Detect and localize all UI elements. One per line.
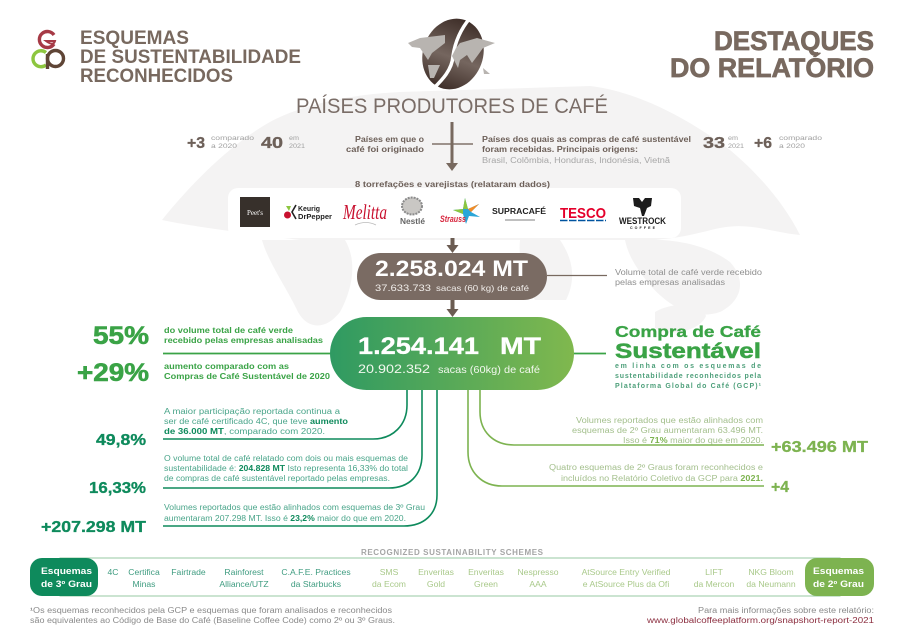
text: sustainable purchase origins: Brasil, Colômbia, Honduras, Indonésia, Vietnã xyxy=(482,156,671,165)
text: 4C share: ser de café certificado 4C, que teve aumento xyxy=(164,417,348,426)
text: more information link xyxy=(646,606,875,625)
list: third-grade schemes: C.A.F.E. Practices xyxy=(281,567,351,577)
text: sustainable purchase origins: Países dos quais as compras de café sustentável xyxy=(482,135,691,144)
text: four new schemes xyxy=(549,463,764,483)
list: third-grade schemes: Certifica xyxy=(128,567,160,577)
connector: right green line xyxy=(572,352,606,354)
text: second-grade volumes: esquemas de 2º Grau aumentaram 63.496 MT. xyxy=(572,426,763,435)
arrow: cross splitter xyxy=(432,122,473,171)
text: 4C share xyxy=(164,407,348,436)
badge: second-grade schemes xyxy=(805,558,874,596)
stats: sustainable countries: 33 xyxy=(703,135,725,152)
list: second-grade schemes: NKG Bloom xyxy=(748,567,794,577)
heading: destaques do relatório xyxy=(670,26,874,83)
list: second-grade schemes: da Ecom xyxy=(372,579,406,589)
text: +29% description xyxy=(164,362,331,381)
logo: Westrock Coffee: WESTROCK xyxy=(619,216,666,227)
text: 55% description: recebido pelas empresas analisadas xyxy=(164,336,324,345)
list: third-grade schemes: da Starbucks xyxy=(291,579,341,589)
stats: sustainable countries xyxy=(703,135,822,152)
connector: left green line xyxy=(163,352,332,354)
text: countries of origin: café foi originado xyxy=(346,145,424,154)
logo: Westrock Coffee xyxy=(619,198,666,230)
text: 55% description xyxy=(164,326,324,345)
stats: sustainable countries: a 2020 xyxy=(779,143,805,150)
stat: 55%: 55% xyxy=(93,322,149,350)
text: sustainable purchase origins: foram recebidas. Principais origens: xyxy=(482,145,638,154)
heading: esquemas de sustentabilidade: RECONHECIDOS xyxy=(80,65,233,87)
text: sustainable purchase origins xyxy=(482,135,691,165)
footnote: são equivalentes ao Código de Base do Café (Baseline Coffee Code) como 2º ou 3º Graus. xyxy=(30,616,395,625)
background world map xyxy=(162,86,800,332)
text: total volume description xyxy=(615,268,763,287)
text: total volume description: pelas empresas analisadas xyxy=(615,278,725,287)
stats: sustainable countries: 2021 xyxy=(728,143,744,150)
connectors: green pill to second-grade blocks xyxy=(468,388,764,486)
logo: Melitta xyxy=(342,200,387,225)
stats: origin countries: a 2020 xyxy=(211,143,237,150)
text: two or more schemes: sustentabilidade é: 204.828 MT Isto representa 16,33% do total xyxy=(164,464,408,473)
heading: compra de café sustentável: sustentabilidade reconhecidos pela xyxy=(615,373,761,380)
heading: países produtores de café: PAÍSES PRODUTORES DE CAFÉ xyxy=(296,93,608,118)
heading: compra de café sustentável xyxy=(615,324,762,390)
text: two or more schemes xyxy=(164,454,409,483)
connector: total volume callout xyxy=(547,274,607,276)
stat: 49,8%: 49,8% xyxy=(96,432,146,449)
list: third-grade schemes xyxy=(108,567,351,589)
logo: Westrock Coffee: COFFEE xyxy=(630,226,656,230)
text: two or more schemes: O volume total de café relatado com dois ou mais esquemas de xyxy=(164,454,409,463)
list: second-grade schemes: LIFT xyxy=(705,567,724,577)
logo: Supracafé: SUPRACAFÉ xyxy=(492,207,546,216)
stat: +63.496 MT: +63.496 MT xyxy=(771,439,868,456)
logo: GCP xyxy=(33,31,64,69)
logo: Nestlé xyxy=(400,198,426,226)
list: third-grade schemes: Fairtrade xyxy=(171,567,206,577)
heading: compra de café sustentável: Compra de Café xyxy=(615,324,761,341)
stats: sustainable countries: +6 xyxy=(754,135,772,152)
logo: Strauss: Strauss xyxy=(440,214,466,225)
stats: sustainable countries: comparado xyxy=(779,135,822,142)
badge: second-grade schemes: Esquemas xyxy=(813,566,864,576)
heading: esquemas de sustentabilidade xyxy=(80,27,301,87)
list: second-grade schemes: e AtSource Plus da Ofi xyxy=(583,579,669,589)
logo: Peet's: Peet's xyxy=(247,209,263,217)
logo: Peet's xyxy=(240,197,270,227)
connectors: green pill to third-grade blocks xyxy=(163,388,437,526)
panel: sustainable purchases: sacas (60kg) de café xyxy=(438,364,540,376)
badge: third-grade schemes: Esquemas xyxy=(41,566,92,576)
list: second-grade schemes: da Mercon xyxy=(694,579,735,589)
stat: +4: +4 xyxy=(771,479,789,496)
list: second-grade schemes: Nespresso xyxy=(517,567,559,577)
stat: +207.298 MT: +207.298 MT xyxy=(41,519,147,536)
text: 4C share: de 36.000 MT , comparado com 2020. xyxy=(164,427,325,436)
text: second-grade volumes xyxy=(572,416,763,445)
list: second-grade schemes: da Neumann xyxy=(746,579,796,589)
text: more information link: Para mais informações sobre este relatório: xyxy=(698,606,874,615)
stat: 16,33%: 16,33% xyxy=(89,480,146,497)
text: roasters and retailers: 8 torrefações e varejistas (relataram dados) xyxy=(355,180,550,189)
list: third-grade schemes: Alliance/UTZ xyxy=(219,579,269,589)
logo: Melitta: Melitta xyxy=(342,200,387,224)
logo: Keurig Dr Pepper: Keurig xyxy=(298,204,320,213)
heading: destaques do relatório: DESTAQUES xyxy=(714,26,874,56)
list: second-grade schemes: Green xyxy=(474,579,498,589)
stats: origin countries: em xyxy=(289,135,299,142)
list: third-grade schemes: Rainforest xyxy=(224,567,264,577)
icon: coffee bean with world map xyxy=(408,10,495,98)
list: second-grade schemes: AAA xyxy=(529,579,547,589)
text: +29% description: Compras de Café Sustentável de 2020 xyxy=(164,372,331,381)
heading: recognized schemes: RECOGNIZED SUSTAINABILITY SCHEMES xyxy=(361,548,544,557)
logo: Tesco: TESCO xyxy=(560,205,606,222)
heading: esquemas de sustentabilidade: DE SUSTENTABILIDADE xyxy=(80,46,301,68)
panel: total green coffee: 2.258.024 MT xyxy=(375,256,529,281)
logo: Strauss xyxy=(440,198,480,225)
text: more information link: www.globalcoffeeplatform.org/snapshort-report-2021 xyxy=(646,616,875,625)
panel: sustainable purchases: 20.902.352 xyxy=(358,362,430,376)
list: second-grade schemes: SMS xyxy=(380,567,399,577)
list: second-grade schemes: Enveritas xyxy=(418,567,454,577)
panel: total green coffee xyxy=(357,253,547,300)
panel: total green coffee: 37.633.733 xyxy=(375,283,431,294)
panel: company logos xyxy=(228,188,681,238)
badge: third-grade schemes xyxy=(30,558,98,596)
panel: sustainable purchases: 1.254.141 xyxy=(358,333,479,360)
list: second-grade schemes xyxy=(372,567,796,589)
stats: origin countries: 40 xyxy=(261,135,283,152)
heading: esquemas de sustentabilidade: ESQUEMAS xyxy=(80,27,189,49)
text: third-grade volumes: Volumes reportados que estão alinhados com esquemas de 3º Grau xyxy=(164,503,425,512)
heading: compra de café sustentável: Sustentável xyxy=(615,340,761,363)
badge: third-grade schemes: de 3º Grau xyxy=(41,579,92,589)
text: four new schemes: Quatro esquemas de 2º Graus foram reconhecidos e xyxy=(549,463,764,472)
footnote: ¹Os esquemas reconhecidos pela GCP e esquemas que foram analisados e reconhecidos xyxy=(30,606,392,615)
stats: origin countries: 2021 xyxy=(289,143,305,150)
heading: destaques do relatório: DO RELATÓRIO xyxy=(670,53,874,83)
text: third-grade volumes xyxy=(164,503,425,523)
text: countries of origin: Países em que o xyxy=(355,135,424,144)
text: total volume description: Volume total de café verde recebido xyxy=(615,268,763,277)
stats: origin countries: comparado xyxy=(211,135,254,142)
panel: schemes band xyxy=(30,558,874,596)
text: 55% description: do volume total de café verde xyxy=(164,326,294,335)
footnote xyxy=(30,606,395,625)
text: third-grade volumes: aumentaram 207.298 MT. Isso é 23,2% maior do que em 2020. xyxy=(164,514,406,523)
logo: Supracafé xyxy=(492,207,546,220)
arrow: logos to total volume xyxy=(446,238,458,253)
heading: compra de café sustentável: em linha com os esquemas de xyxy=(615,363,761,370)
stats: origin countries xyxy=(187,135,305,152)
logo: Keurig Dr Pepper xyxy=(284,204,332,221)
badge: second-grade schemes: de 2º Grau xyxy=(813,579,864,589)
list: third-grade schemes: Minas xyxy=(133,579,155,589)
panel: sustainable purchases xyxy=(330,317,574,390)
text: +29% description: aumento comparado com as xyxy=(164,362,290,371)
list: second-grade schemes: Gold xyxy=(427,579,445,589)
text: two or more schemes: de compras de café sustentável reportado pelas empresas. xyxy=(164,474,390,483)
heading: compra de café sustentável: Plataforma Global do Café (GCP)¹ xyxy=(615,383,762,390)
list: third-grade schemes: 4C xyxy=(108,567,118,577)
list: second-grade schemes: Enveritas xyxy=(468,567,504,577)
logo: Nestlé: Nestlé xyxy=(400,217,426,226)
logo: Keurig Dr Pepper: DrPepper xyxy=(298,212,332,221)
text: 4C share: A maior participação reportada continua a xyxy=(164,407,341,416)
arrow: total to sustainable xyxy=(446,300,458,317)
text: countries of origin xyxy=(346,135,424,154)
panel: total green coffee: sacas (60 kg) de café xyxy=(436,283,529,293)
text: second-grade volumes: Volumes reportados que estão alinhados com xyxy=(576,416,763,425)
stats: sustainable countries: em xyxy=(728,135,738,142)
panel: sustainable purchases: MT xyxy=(500,333,541,360)
stat: +29%: +29% xyxy=(77,359,149,387)
stats: origin countries: +3 xyxy=(187,135,205,152)
text: second-grade volumes: Isso é 71% maior do que em 2020. xyxy=(623,436,763,445)
list: second-grade schemes: AtSource Entry Verified xyxy=(582,567,671,577)
text: four new schemes: incluídos no Relatório Coletivo da GCP para 2021. xyxy=(561,474,763,483)
